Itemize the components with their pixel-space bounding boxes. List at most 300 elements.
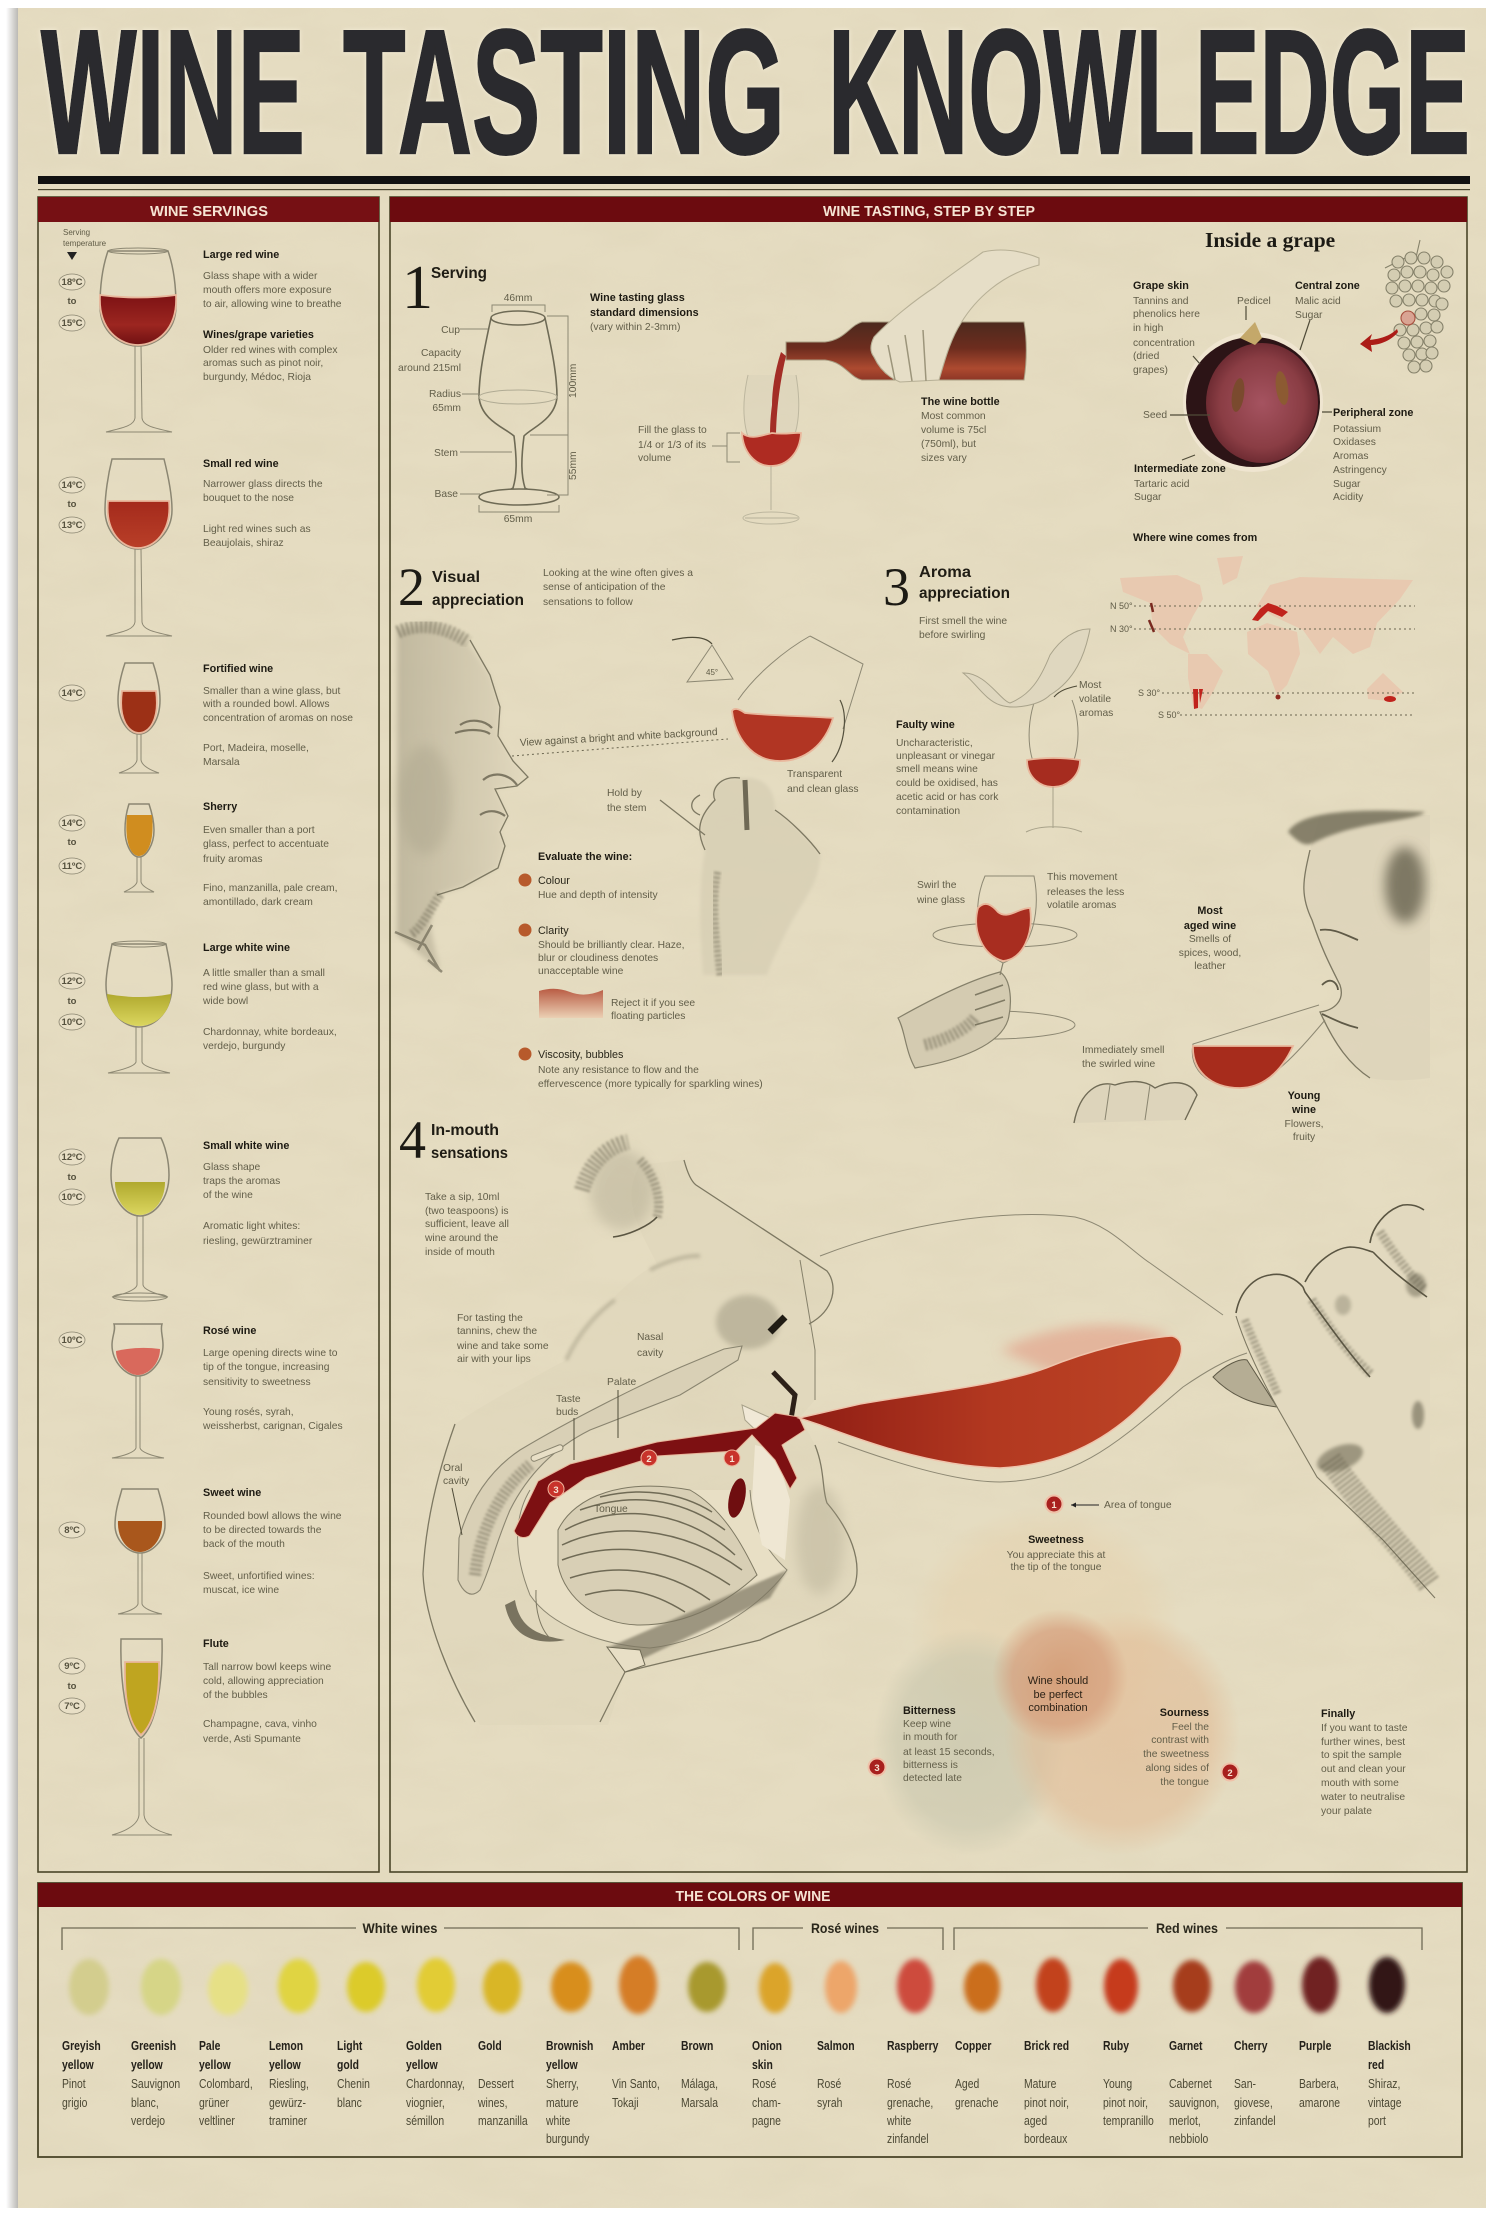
- colour labels: white wines: sémillon: [406, 2114, 444, 2128]
- grape labels: Aromas: [1333, 451, 1368, 462]
- serving: fortified wine: 14ºC: [62, 688, 83, 699]
- colour labels: white wines: burgundy: [546, 2132, 589, 2146]
- serving: large white wine: Chardonnay, white bordeaux,: [203, 1027, 337, 1038]
- anatomy labels: Taste: [556, 1394, 581, 1405]
- serving: flute: Champagne, cava, vinho: [203, 1719, 317, 1730]
- grape labels: Sugar: [1134, 492, 1162, 503]
- colour labels: white wines: Greyish: [62, 2039, 101, 2053]
- serving temperature key: [63, 228, 107, 260]
- serving: sweet wine: to be directed towards the: [203, 1525, 322, 1536]
- serving: sweet wine: 8ºC: [64, 1525, 80, 1536]
- finally text: to spit the sample: [1321, 1750, 1402, 1761]
- grape labels: Central zone: [1295, 280, 1360, 292]
- colour labels: white wines: Colombard,: [199, 2077, 253, 2091]
- serving: sherry: amontillado, dark cream: [203, 897, 313, 908]
- colour labels: red wines: Copper: [955, 2039, 992, 2053]
- colour labels: white wines: yellow: [62, 2058, 95, 2072]
- anatomy labels: Tongue: [594, 1504, 628, 1515]
- clarity text: unacceptable wine: [538, 966, 624, 977]
- colour labels: white wines: Chardonnay,: [406, 2077, 465, 2091]
- tasting glass diagram: Capacity: [421, 348, 462, 359]
- serving: small red wine: Light red wines such as: [203, 524, 311, 535]
- grape labels: Acidity: [1333, 492, 1364, 503]
- most aged wine caption: Smells of: [1189, 934, 1231, 945]
- sourness text: Feel the: [1172, 1722, 1209, 1733]
- colour labels: white wines: blanc: [337, 2096, 362, 2110]
- tasting glass diagram: around 215ml: [398, 363, 461, 374]
- grape labels: Pedicel: [1237, 296, 1271, 307]
- glass captions: the stem: [607, 803, 646, 814]
- sourness text: Sourness: [1160, 1707, 1209, 1719]
- sip instructions: wine around the: [424, 1233, 499, 1244]
- colour labels: red wines: Cherry: [1234, 2039, 1268, 2053]
- illustration: glass under hand: [963, 629, 1090, 832]
- tannin instructions: For tasting the: [457, 1313, 523, 1324]
- panel: the colors of wine: [38, 1883, 1462, 2157]
- finally text: your palate: [1321, 1806, 1372, 1817]
- colour labels: red wines: Mature: [1024, 2077, 1057, 2091]
- serving: large red wine: aromas such as pinot noir,: [203, 358, 323, 369]
- colour labels: white wines: white: [545, 2114, 571, 2128]
- serving: sherry: Even smaller than a port: [203, 825, 315, 836]
- illustration: tilted glass and hand: [660, 636, 863, 975]
- marker a: colour: [518, 874, 532, 886]
- serving: large white wine: to: [68, 996, 77, 1007]
- serving: large red wine: to air, allowing wine to breathe: [203, 299, 342, 310]
- grape labels: Tannins and: [1133, 296, 1189, 307]
- colour labels: white wines: veltliner: [199, 2114, 235, 2128]
- swirl captions: Swirl the: [917, 880, 957, 891]
- taste venn diagram: [873, 1505, 1240, 1856]
- perfect combination text: [1028, 1675, 1088, 1714]
- faulty wine text: contamination: [896, 806, 960, 817]
- step 3 heading: 3: [883, 557, 910, 617]
- serving: small white wine: riesling, gewürztraminer: [203, 1236, 313, 1247]
- tasting glass diagram: Radius: [429, 389, 461, 400]
- evaluate the wine checklist: Evaluate the wine:: [538, 851, 632, 863]
- world map: N 50°: [1110, 601, 1133, 611]
- young wine caption: Young: [1288, 1090, 1320, 1102]
- sourness text: the tongue: [1160, 1777, 1209, 1788]
- colour labels: white wines: Amber: [612, 2039, 645, 2053]
- colour labels: white wines: grigio: [62, 2096, 88, 2110]
- serving: sherry: 11ºC: [62, 861, 82, 872]
- bracket: white wines: White wines: [362, 1920, 438, 1936]
- step 1 heading: [402, 254, 487, 322]
- clarity text: blur or cloudiness denotes: [538, 953, 658, 964]
- wine bottle caption: Most common: [921, 411, 986, 422]
- heading: wine servings: WINE SERVINGS: [150, 203, 268, 220]
- sourness text: along sides of: [1145, 1763, 1209, 1774]
- faulty wine text: acetic acid or has cork: [896, 792, 999, 803]
- colour labels: rose wines: white: [886, 2114, 912, 2128]
- tasting glass diagram: Stem: [434, 448, 458, 459]
- where wine comes from: [1110, 532, 1415, 720]
- finally text: mouth with some: [1321, 1778, 1399, 1789]
- step 3 heading: Aroma: [919, 564, 971, 581]
- title rule: [38, 176, 1470, 190]
- serving: rose wine: Large opening directs wine to: [203, 1348, 338, 1359]
- fill level caption: 1/4 or 1/3 of its: [638, 440, 706, 451]
- serving: large white wine: A little smaller than a small: [203, 968, 325, 979]
- heading: wine servings: [38, 197, 379, 222]
- illustration: head cross section: [423, 1142, 857, 1725]
- clarity text: Should be brilliantly clear. Haze,: [538, 940, 685, 951]
- grape labels: Oxidases: [1333, 437, 1376, 448]
- illustration: tasting glass and wine stream: [799, 1215, 1247, 1482]
- tannin instructions: wine and take some: [456, 1341, 549, 1352]
- serving: rose wine: sensitivity to sweetness: [203, 1377, 311, 1388]
- faulty wine text: could be oxidised, has: [896, 778, 998, 789]
- colour labels: red wines: tempranillo: [1103, 2114, 1154, 2128]
- illustration: glass being filled: [712, 352, 801, 524]
- most aged wine caption: leather: [1194, 961, 1226, 972]
- grape labels: Malic acid: [1295, 296, 1341, 307]
- grape heading: Inside a grape: [1205, 228, 1335, 252]
- young wine caption: fruity: [1293, 1132, 1316, 1143]
- colour labels: rose wines: skin: [752, 2058, 773, 2072]
- young wine caption: Flowers,: [1285, 1119, 1323, 1130]
- sourness marker: [1222, 1764, 1238, 1780]
- tongue key: Area of tongue: [1104, 1500, 1172, 1511]
- heading: colors of wine: THE COLORS OF WINE: [676, 1888, 830, 1905]
- colour labels: red wines: zinfandel: [1234, 2114, 1276, 2128]
- bitterness text: bitterness is: [903, 1760, 958, 1771]
- sweetness text: You appreciate this at: [1007, 1550, 1105, 1561]
- illustration: swirling glass: [898, 876, 1077, 1068]
- serving: fortified wine: Fortified wine: [203, 663, 273, 675]
- colour labels: white wines: viognier,: [406, 2096, 445, 2110]
- most aged wine caption: Most: [1197, 905, 1223, 917]
- grape labels: [1133, 280, 1413, 503]
- illustration: man smelling wine: [1074, 811, 1430, 1123]
- serving: small red wine: Small red wine: [203, 458, 279, 470]
- serving: large red wine: [59, 248, 342, 432]
- step 2 heading: 2: [398, 557, 425, 617]
- icon: 45 degree angle: 45°: [706, 668, 718, 677]
- colour labels: red wines: Ruby: [1103, 2039, 1129, 2053]
- serving: fortified wine: Marsala: [203, 757, 240, 768]
- colour labels: white wines: gewürz-: [269, 2096, 306, 2110]
- young wine caption: wine: [1291, 1104, 1316, 1116]
- grape labels: Sugar: [1333, 479, 1361, 490]
- colour labels: rose wines: grenache,: [887, 2096, 933, 2110]
- sweetness text: [1007, 1534, 1105, 1573]
- colour labels: white wines: mature: [546, 2096, 579, 2110]
- serving: sherry: fruity aromas: [203, 854, 263, 865]
- serving: large red wine: 18ºC: [62, 277, 83, 288]
- colour labels: red wines: [955, 2039, 1411, 2146]
- tongue markers: [548, 1450, 740, 1497]
- swirl captions: releases the less: [1047, 887, 1124, 898]
- step 1: serving: [398, 250, 1039, 525]
- colour labels: white wines: Chenin: [337, 2077, 370, 2091]
- most aged wine caption: spices, wood,: [1179, 948, 1241, 959]
- step 4: in-mouth sensations: [399, 1110, 1435, 1856]
- sweetness text: Sweetness: [1028, 1534, 1084, 1546]
- fill level caption: Fill the glass to: [638, 425, 707, 436]
- colour labels: white wines: yellow: [269, 2058, 302, 2072]
- sourness text: the sweetness: [1143, 1749, 1209, 1760]
- heading: colors of wine: [38, 1883, 1462, 1907]
- step 3: aroma appreciation: [883, 557, 1430, 1143]
- world map: [1110, 556, 1415, 720]
- colour labels: white wines: Riesling,: [269, 2077, 309, 2091]
- marker b: clarity: [518, 924, 532, 936]
- bitterness marker: [868, 1758, 886, 1776]
- step 4 heading: In-mouth: [431, 1122, 499, 1139]
- anatomy labels: Oral: [443, 1463, 462, 1474]
- colour labels: red wines: San-: [1234, 2077, 1256, 2091]
- anatomy labels: cavity: [443, 1476, 470, 1487]
- colour labels: rose wines: pagne: [752, 2114, 781, 2128]
- anatomy labels: Nasal: [637, 1332, 663, 1343]
- serving: sherry: 14ºC: [62, 818, 83, 829]
- evaluate the wine checklist: [518, 851, 763, 1090]
- perfect combination text: be perfect: [1034, 1689, 1082, 1701]
- aroma caption: volatile: [1079, 694, 1111, 705]
- sip instructions: inside of mouth: [425, 1247, 495, 1258]
- colour labels: white wines: Dessert: [478, 2077, 514, 2091]
- serving: sweet wine: muscat, ice wine: [203, 1585, 279, 1596]
- colour labels: red wines: aged: [1024, 2114, 1047, 2128]
- tasting glass diagram: [398, 293, 579, 525]
- serving: rose wine: tip of the tongue, increasing: [203, 1362, 330, 1373]
- step 2 heading: Visual: [432, 569, 480, 586]
- colour labels: red wines: sauvignon,: [1169, 2096, 1219, 2110]
- anatomy labels: [443, 1332, 664, 1535]
- tongue key: [1046, 1496, 1172, 1512]
- step 2 intro: sensations to follow: [543, 597, 633, 608]
- serving: flute: Tall narrow bowl keeps wine: [203, 1662, 331, 1673]
- most aged wine caption: [1179, 905, 1241, 972]
- bitterness text: at least 15 seconds,: [903, 1747, 995, 1758]
- serving: small white wine: [59, 1138, 313, 1301]
- wine bottle caption: (750ml), but: [921, 439, 976, 450]
- bitterness text: Keep wine: [903, 1719, 951, 1730]
- colour labels: red wines: Purple: [1299, 2039, 1332, 2053]
- serving: rose wine: Young rosés, syrah,: [203, 1407, 294, 1418]
- serving: small white wine: traps the aromas: [203, 1176, 280, 1187]
- floating particles caption: Reject it if you see: [611, 998, 695, 1009]
- arrow: grape to cross section: [1360, 329, 1398, 352]
- aroma caption: aromas: [1079, 708, 1113, 719]
- serving: large white wine: 10ºC: [62, 1017, 83, 1028]
- serving: rose wine: weissherbst, carignan, Cigales: [202, 1421, 343, 1432]
- sourness text: [1143, 1707, 1209, 1788]
- tasting glass diagram: 100mm: [568, 364, 579, 398]
- serving: small white wine: Glass shape: [203, 1162, 261, 1173]
- step 3 intro: before swirling: [919, 630, 986, 641]
- serving: small white wine: to: [68, 1172, 77, 1183]
- colour labels: white wines: manzanilla: [478, 2114, 528, 2128]
- step 1 heading: Serving: [431, 265, 487, 282]
- colour labels: red wines: red: [1368, 2058, 1384, 2072]
- tasting glass diagram: Base: [435, 489, 458, 500]
- tongue markers: 1: [729, 1454, 735, 1465]
- colour labels: white wines: Tokaji: [612, 2096, 639, 2110]
- sight line: [512, 739, 728, 756]
- serving: small red wine: Narrower glass directs the: [203, 479, 323, 490]
- grape labels: Astringency: [1333, 465, 1388, 476]
- serving: sherry: glass, perfect to accentuate: [203, 839, 329, 850]
- illustration: man viewing wine: [395, 622, 528, 972]
- colour labels: rose wines: Onion: [752, 2039, 782, 2053]
- colour labels: white wines: verdejo: [131, 2114, 165, 2128]
- colour labels: red wines: pinot noir,: [1103, 2096, 1148, 2110]
- colour labels: white wines: blanc,: [131, 2096, 159, 2110]
- step 4 heading: 4: [399, 1110, 426, 1170]
- colour labels: white wines: Sherry,: [546, 2077, 579, 2091]
- illustration: pouring bottle: [786, 250, 1039, 382]
- sip instructions: (two teaspoons) is: [425, 1206, 509, 1217]
- faulty wine text: smell means wine: [896, 764, 978, 775]
- wine bottle caption: The wine bottle: [921, 396, 1000, 408]
- colour labels: red wines: Shiraz,: [1368, 2077, 1400, 2091]
- colour labels: white wines: [62, 2039, 718, 2146]
- colour labels: white wines: gold: [337, 2058, 359, 2072]
- bracket: red wines: Red wines: [1156, 1920, 1218, 1936]
- finally text: Finally: [1321, 1708, 1355, 1720]
- grape cross section: [1170, 306, 1332, 472]
- serving: small white wine: 12ºC: [62, 1152, 83, 1163]
- step 2 intro: Looking at the wine often gives a: [543, 568, 693, 579]
- step 4 heading: [399, 1110, 508, 1170]
- serving: sherry: to: [68, 837, 77, 848]
- finally text: out and clean your: [1321, 1764, 1406, 1775]
- colour labels: white wines: yellow: [199, 2058, 232, 2072]
- swirl captions: [916, 872, 1124, 911]
- serving: large red wine: Older red wines with complex: [203, 345, 338, 356]
- colour labels: red wines: grenache: [955, 2096, 999, 2110]
- colour text: Colour: [538, 875, 570, 887]
- serving: large red wine: Glass shape with a wider: [203, 271, 318, 282]
- grape labels: Potassium: [1333, 424, 1381, 435]
- immediately smell caption: Immediately smell: [1082, 1045, 1164, 1056]
- colour labels: red wines: Garnet: [1169, 2039, 1203, 2053]
- colour labels: rose wines: syrah: [817, 2096, 842, 2110]
- tasting glass diagram: 65mm: [432, 403, 461, 414]
- colour swatches: [69, 1956, 1405, 2015]
- bracket: white wines: [62, 1920, 739, 1950]
- serving: sweet wine: back of the mouth: [203, 1539, 285, 1550]
- colour labels: rose wines: [752, 2039, 939, 2146]
- world map: N 30°: [1110, 624, 1133, 634]
- serving: large white wine: red wine glass, but with a: [203, 982, 319, 993]
- serving: small red wine: [59, 458, 323, 636]
- inside a grape: [1133, 228, 1453, 503]
- colour labels: white wines: Marsala: [681, 2096, 718, 2110]
- serving: flute: of the bubbles: [203, 1690, 268, 1701]
- grape labels: Sugar: [1295, 310, 1323, 321]
- serving: flute: verde, Asti Spumante: [203, 1734, 301, 1745]
- colour labels: white wines: Pinot: [62, 2077, 86, 2091]
- glass captions: [607, 769, 859, 814]
- heading: step by step: [390, 197, 1467, 222]
- serving: fortified wine: concentration of aromas on nose: [203, 713, 353, 724]
- serving: sweet wine: Sweet wine: [203, 1487, 261, 1499]
- colour labels: white wines: Brown: [681, 2039, 713, 2053]
- colour labels: white wines: yellow: [406, 2058, 439, 2072]
- grape labels: Seed: [1143, 410, 1167, 421]
- colour labels: rose wines: cham-: [752, 2096, 781, 2110]
- colour labels: red wines: bordeaux: [1024, 2132, 1067, 2146]
- anatomy labels: Palate: [607, 1377, 636, 1388]
- faulty wine text: unpleasant or vinegar: [896, 751, 996, 762]
- bitterness marker: 3: [874, 1763, 880, 1774]
- colour labels: rose wines: Rosé: [887, 2077, 912, 2091]
- step 2: visual appreciation: [395, 557, 863, 1090]
- floating particles swatch: [539, 989, 603, 1018]
- serving: fortified wine: with a rounded bowl. Allows: [202, 699, 330, 710]
- serving: small red wine: to: [68, 499, 77, 510]
- perfect combination text: combination: [1028, 1702, 1088, 1714]
- colour labels: red wines: Aged: [955, 2077, 979, 2091]
- sourness text: contrast with: [1151, 1735, 1209, 1746]
- bitterness text: Bitterness: [903, 1705, 956, 1717]
- swirl captions: This movement: [1047, 872, 1118, 883]
- bracket: rose wines: [753, 1920, 943, 1950]
- step 2 intro: sense of anticipation of the: [543, 582, 666, 593]
- grape labels: phenolics here: [1133, 309, 1200, 320]
- serving: sherry: Fino, manzanilla, pale cream,: [203, 883, 338, 894]
- serving: large white wine: 12ºC: [62, 976, 83, 987]
- step 1 heading: 1: [402, 254, 433, 322]
- bracket: red wines: [954, 1920, 1422, 1950]
- colour labels: rose wines: Raspberry: [887, 2039, 939, 2053]
- colour labels: white wines: Vin Santo,: [612, 2077, 660, 2091]
- serving: large white wine: verdejo, burgundy: [203, 1041, 286, 1052]
- illustration: hand holding glass: [1213, 1205, 1435, 1598]
- panel: wine servings: [38, 197, 379, 1872]
- colour labels: white wines: yellow: [546, 2058, 579, 2072]
- finally text: further wines, best: [1321, 1737, 1405, 1748]
- grape labels: concentration: [1133, 338, 1195, 349]
- serving: large red wine: burgundy, Médoc, Rioja: [203, 372, 311, 383]
- tasting glass diagram: Cup: [441, 325, 460, 336]
- serving: rose wine: Rosé wine: [203, 1325, 256, 1337]
- colour labels: red wines: amarone: [1299, 2096, 1340, 2110]
- faulty wine text: Faulty wine: [896, 719, 955, 731]
- swirl captions: volatile aromas: [1047, 900, 1116, 911]
- serving: flute: Flute: [203, 1638, 229, 1650]
- colour labels: white wines: wines,: [477, 2096, 507, 2110]
- icon: 45 degree angle: [672, 637, 733, 682]
- colour labels: red wines: port: [1368, 2114, 1387, 2128]
- faulty wine text: Uncharacteristic,: [896, 738, 973, 749]
- colour labels: white wines: Brownish: [546, 2039, 593, 2053]
- glass captions: and clean glass: [787, 784, 859, 795]
- colour labels: white wines: Gold: [478, 2039, 502, 2053]
- colour labels: rose wines: Salmon: [817, 2039, 855, 2053]
- step 3 heading: [883, 557, 1010, 617]
- clarity text: Clarity: [538, 925, 569, 937]
- colour labels: white wines: Golden: [406, 2039, 442, 2053]
- glass captions: Transparent: [787, 769, 842, 780]
- colour labels: rose wines: Rosé: [752, 2077, 777, 2091]
- serving: small red wine: Beaujolais, shiraz: [203, 538, 284, 549]
- serving: small white wine: of the wine: [203, 1190, 253, 1201]
- serving: small red wine: bouquet to the nose: [203, 493, 294, 504]
- glass captions: Hold by: [607, 788, 643, 799]
- colour labels: red wines: nebbiolo: [1169, 2132, 1209, 2146]
- fill level caption: volume: [638, 453, 671, 464]
- step 2 heading: appreciation: [432, 592, 524, 609]
- glass dimensions caption: standard dimensions: [590, 307, 699, 319]
- perfect combination text: Wine should: [1028, 1675, 1088, 1687]
- tasting glass diagram: 65mm: [504, 514, 532, 525]
- panel: wine tasting step by step: [390, 197, 1467, 1872]
